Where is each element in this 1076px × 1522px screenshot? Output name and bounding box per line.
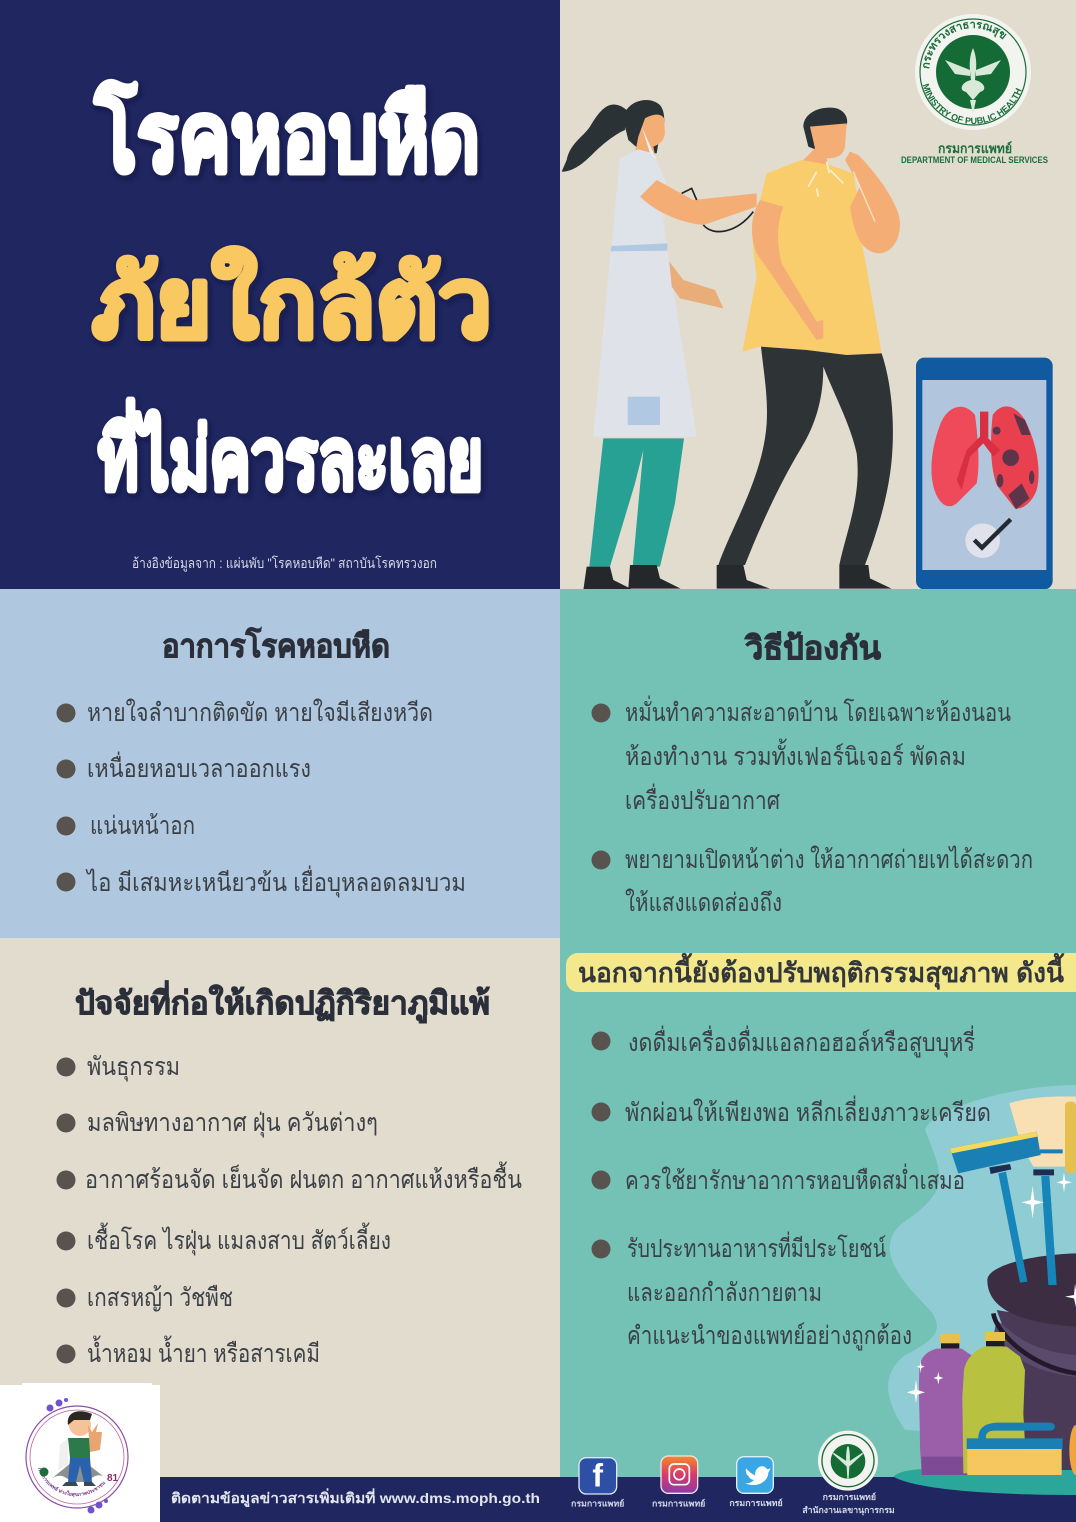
heading: prevention: วิธีป้องกัน [744, 630, 881, 666]
scrub brush [967, 1423, 1076, 1475]
heading: symptoms: อาการโรคหอบหืด [162, 627, 390, 664]
footer band [160, 1477, 1076, 1522]
callout: behaviour banner: นอกจากนี้ยังต้องปรับพฤติกรรมสุขภาพ ดังนี้ [578, 952, 1065, 990]
panel: symptoms [0, 589, 560, 938]
behaviour list [592, 1025, 991, 1351]
behaviour list: คำแนะนำของแพทย์อย่างถูกต้อง [627, 1322, 912, 1351]
broom handle front [1041, 1176, 1057, 1285]
prevention list: ให้แสงแดดส่องถึง [625, 888, 782, 917]
purple bottle [919, 1334, 973, 1475]
broom [1009, 1096, 1076, 1285]
panel: title block [0, 0, 560, 589]
source reference: อ้างอิงข้อมูลจาก : แผ่นพับ "โรคหอบหืด" สถาบันโรคทรวงอก [132, 555, 437, 572]
cleaning background blob [888, 1085, 1076, 1440]
behaviour list: งดดื่มเครื่องดื่มแอลกอฮอล์หรือสูบบุหรี่ [628, 1025, 975, 1058]
title line 1: โรคหอบหืด [94, 81, 480, 192]
title line 2: ภัยใกล้ตัว [92, 248, 492, 358]
bucket [987, 1253, 1076, 1470]
triggers list: พันธุกรรม [87, 1053, 180, 1082]
icon: instagram: กรมการแพทย์ [652, 1499, 705, 1509]
symptoms list: เหนื่อยหอบเวลาออกแรง [87, 751, 311, 783]
icon: twitter: กรมการแพทย์ [729, 1498, 783, 1508]
triggers list [56, 1053, 522, 1368]
logo: mascot badge: กรมการแพทย์ ห่วงใยสุขภาพประชาชน [38, 1468, 106, 1498]
logo: department [802, 1431, 895, 1516]
logo: Ministry of Public Health [901, 14, 1048, 165]
social icons and labels [571, 1431, 895, 1516]
mop [950, 1132, 1063, 1283]
triggers list: น้ำหอม น้ำยา หรือสารเคมี [87, 1335, 320, 1368]
heading: triggers: ปัจจัยที่ก่อให้เกิดปฏิกิริยาภูมิแพ้ [75, 980, 490, 1024]
prevention list: เครื่องปรับอากาศ [625, 783, 780, 815]
patient [717, 108, 900, 589]
icon: phone with lungs [916, 358, 1053, 589]
illustration: cleaning supplies [893, 1096, 1076, 1495]
symptoms list: ไอ มีเสมหะเหนียวข้น เยื่อบุหลอดลมบวม [85, 865, 466, 898]
behaviour list: ควรใช้ยารักษาอาการหอบหืดสม่ำเสมอ [625, 1163, 965, 1195]
logo: mascot badge: 81 [107, 1473, 119, 1484]
logo: department: กรมการแพทย์ [823, 1492, 876, 1502]
icon: facebook [571, 1458, 624, 1509]
mascot figure [50, 1411, 108, 1486]
logo: Ministry of Public Health: กระทรวงสาธารณสุข [923, 22, 1007, 68]
sparkles [907, 1173, 1076, 1403]
icon: instagram [652, 1456, 705, 1509]
symptoms list: แน่นหน้าอก [90, 812, 195, 840]
triggers list: เชื้อโรค ไรฝุ่น แมลงสาบ สัตว์เลี้ยง [87, 1222, 391, 1256]
icon: facebook: กรมการแพทย์ [571, 1499, 624, 1509]
nurse [562, 100, 757, 590]
triggers list: เกสรหญ้า วัชพืช [87, 1284, 233, 1312]
icon: twitter [729, 1457, 783, 1508]
symptoms list: หายใจลำบากติดขัด หายใจมีเสียงหวีด [87, 698, 433, 727]
behaviour list: และออกกำลังกายตาม [627, 1279, 822, 1307]
triggers list: มลพิษทางอากาศ ฝุ่น ควันต่างๆ [87, 1109, 378, 1138]
logo: department: สำนักงานเลขานุการกรม [802, 1505, 895, 1516]
platform [893, 1467, 1076, 1495]
symptoms list [56, 698, 466, 898]
logo: Ministry of Public Health: DEPARTMENT OF MEDICAL SERVICES [901, 155, 1048, 165]
behaviour list: พักผ่อนให้เพียงพอ หลีกเลี่ยงภาวะเครียด [625, 1095, 991, 1127]
logo: Ministry of Public Health: MINISTRY OF PUBLIC HEALTH [922, 84, 1022, 124]
panel: allergy triggers [56, 980, 522, 1368]
footer text: ติดตามข้อมูลข่าวสารเพิ่มเติมที่ www.dms.moph.go.th [171, 1488, 540, 1507]
behaviour list: รับประทานอาหารที่มีประโยชน์ [627, 1231, 886, 1263]
illustration: nurse examining coughing patient [562, 100, 1053, 590]
yellow bottle [962, 1332, 1027, 1473]
department name: กรมการแพทย์ [938, 141, 1012, 156]
prevention list [592, 695, 1033, 917]
triggers list: อากาศร้อนจัด เย็นจัด ฝนตก อากาศแห้งหรือชื้น [85, 1161, 522, 1194]
panel: prevention [560, 589, 1076, 1479]
icon: facebook: f [592, 1458, 603, 1494]
logo: mascot badge [0, 1383, 160, 1522]
prevention list: ห้องทำงาน รวมทั้งเฟอร์นิเจอร์ พัดลม [625, 738, 966, 771]
title line 3: ที่ไม่ควรละเลย [98, 398, 483, 508]
